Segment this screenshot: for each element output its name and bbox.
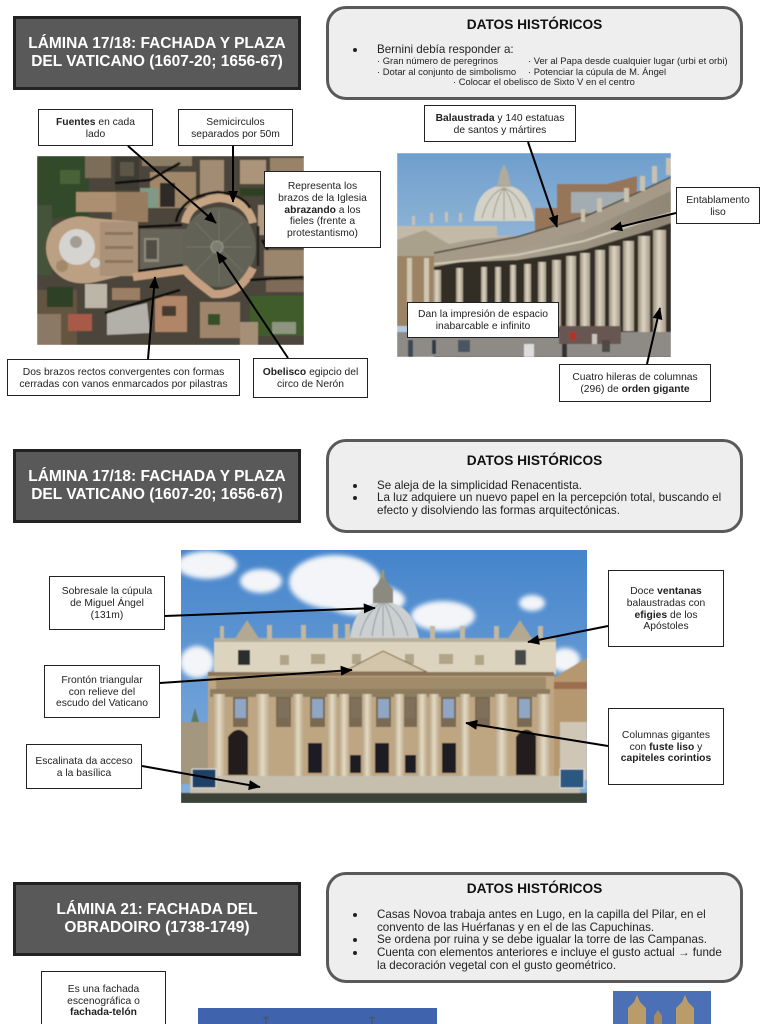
callout: hileras de columnas: (296) de orden gigante (580, 384, 690, 395)
bullet list: · Gran número de peregrinos (377, 55, 498, 66)
callout: semicirculos: Semicirculos (206, 117, 265, 128)
callout: cúpula: Sobresale la cúpula (62, 586, 152, 597)
bullet list: Se ordena por ruina y se debe igualar la torre de las Campanas. (377, 933, 707, 946)
callout: brazos rectos: cerradas con vanos enmarcados por pilastras (19, 378, 228, 390)
title: Lámina 17/18 first block: DEL VATICANO (1607-20; 1656-67) (31, 53, 283, 70)
callout: espacio infinito (407, 302, 559, 338)
bullet list: Se aleja de la simplicidad Renacentista. (377, 479, 582, 492)
panel: datos históricos 3 (326, 872, 743, 983)
title: Lámina 17/18 second block (13, 449, 301, 523)
callout: espacio infinito: Dan la impresión de espacio (418, 309, 548, 320)
title: Lámina 17/18 first block (13, 16, 301, 90)
arrow: ventanas (528, 626, 608, 642)
title: Lámina 17/18 second block: DEL VATICANO (1607-20; 1656-67) (31, 486, 283, 503)
callout: balaustrada (424, 105, 576, 142)
heading: DATOS HISTÓRICOS (467, 881, 602, 896)
callout: columnas gigantes: con fuste liso y (630, 742, 702, 753)
callout: cúpula: de Miguel Ángel (70, 598, 144, 609)
bullet list (353, 479, 721, 517)
bullet list (353, 43, 728, 87)
title: Lámina 21: OBRADOIRO (1738-1749) (64, 919, 250, 936)
callout: escalinata: Escalinata da acceso (35, 756, 133, 767)
arrow: frontón (160, 670, 352, 683)
callout: obelisco: Obelisco egipcio del (263, 367, 358, 378)
callout: brazos de la Iglesia (264, 171, 381, 248)
arrow: balaustrada (528, 142, 557, 227)
title: Lámina 17/18 second block: LÁMINA 17/18: FACHADA Y PLAZA (28, 468, 286, 485)
callout: fachada-telón: Es una fachada (68, 984, 139, 995)
callout: columnas gigantes: capiteles corintios (621, 753, 711, 764)
callout: balaustrada: de santos y mártires (454, 124, 546, 136)
bullet list: · Colocar el obelisco de Sixto V en el centro (453, 76, 635, 87)
image: Obradoiro towers (613, 991, 711, 1024)
bullet list: efecto y disolviendo las formas arquitectónicas. (377, 504, 620, 517)
bullet list: Casas Novoa trabaja antes en Lugo, en la capilla del Pilar, en el (377, 908, 706, 921)
arrow: brazos rectos (148, 277, 155, 359)
callout: frontón: Frontón triangular (61, 675, 143, 686)
image: colonnade photograph (397, 153, 671, 373)
title: Lámina 17/18 first block: LÁMINA 17/18: FACHADA Y PLAZA (28, 35, 286, 52)
callout: escalinata (26, 744, 142, 789)
bullet list: · Potenciar la cúpula de M. Ángel (528, 66, 666, 77)
title: Lámina 21: LÁMINA 21: FACHADA DEL (56, 901, 258, 918)
heading: DATOS HISTÓRICOS (467, 17, 602, 32)
callout: brazos de la Iglesia: Representa los (288, 181, 357, 192)
callout: semicirculos: separados por 50m (191, 128, 280, 140)
image: Obradoiro facade, wide crop (198, 1008, 437, 1024)
callout: frontón: escudo del Vaticano (56, 698, 148, 709)
arrow: obelisco (217, 252, 288, 358)
callout: escalinata: a la basílica (57, 768, 111, 778)
callout: cúpula (49, 576, 165, 630)
callout: ventanas: efigies de los (635, 610, 697, 620)
bullet list: Bernini debía responder a: (377, 43, 514, 56)
heading: DATOS HISTÓRICOS (467, 453, 602, 468)
callout: brazos de la Iglesia: protestantismo) (287, 228, 358, 239)
callout: hileras de columnas: Cuatro hileras de columnas (572, 372, 698, 383)
arrow: columnas (647, 308, 660, 364)
panel: datos históricos 2 (326, 439, 743, 533)
panel: datos históricos 1 (326, 6, 743, 100)
bullet list: · Ver al Papa desde cualquier lugar (urbi et orbi) (528, 55, 728, 66)
callout: fachada-telón: escenográfica o (67, 996, 140, 1007)
callout: frontón: con relieve del (69, 687, 135, 698)
image: St Peter's facade photograph (177, 550, 587, 803)
callout: brazos de la Iglesia: brazos de la Iglesia (278, 193, 367, 204)
callout: fachada-telón (41, 971, 166, 1024)
callout: brazos rectos: Dos brazos rectos convergentes con formas (23, 367, 224, 378)
callout: balaustrada: Balaustrada y 140 estatuas (436, 113, 564, 124)
bullet list: Cuenta con elementos anteriores e incluye el gusto actual → funde (377, 946, 722, 959)
callout: entablamento: liso (710, 206, 726, 218)
callout: obelisco: circo de Nerón (277, 379, 344, 390)
callout: entablamento (676, 187, 760, 224)
callout: ventanas: Doce ventanas (630, 586, 702, 597)
arrow: entablamento (611, 213, 676, 229)
bullet list: · Dotar al conjunto de simbolismo (377, 66, 516, 77)
callout: fuentes: lado (86, 128, 105, 140)
callout: brazos de la Iglesia: fieles (frente a (290, 216, 355, 227)
callout: hileras de columnas (559, 364, 711, 402)
arrow: cúpula (165, 608, 375, 616)
callout: ventanas: balaustradas con (627, 598, 705, 609)
callout: espacio infinito: inabarcable e infinito (436, 321, 530, 332)
callout: ventanas (608, 570, 724, 647)
callout: columnas gigantes: Columnas gigantes (622, 730, 710, 741)
callout: brazos rectos (7, 359, 240, 396)
arrow: escalinata (142, 766, 260, 787)
callout: entablamento: Entablamento (686, 195, 750, 206)
callout: semicirculos (178, 109, 293, 146)
title: Lámina 21 (13, 882, 301, 956)
callout: frontón (44, 665, 160, 718)
arrow: fuentes (128, 146, 216, 223)
images layer (37, 153, 711, 1024)
callout: ventanas: Apóstoles (643, 621, 689, 632)
callout: obelisco (253, 358, 368, 398)
callout: fachada-telón: fachada-telón (70, 1007, 137, 1018)
bullet list: la decoración vegetal con el gusto geométrico. (377, 959, 616, 972)
arrow: semicirculos (232, 146, 234, 202)
bullet list: La luz adquiere un nuevo papel en la percepción total, buscando el (377, 491, 721, 504)
callout: brazos de la Iglesia: abrazando a los (284, 205, 361, 216)
image: aerial view of St Peter's square (37, 156, 304, 345)
bullet list: convento de las Huérfanas y en el de las Capuchinas. (377, 921, 654, 934)
callout: cúpula: (131m) (91, 610, 123, 621)
bullet list (353, 908, 722, 972)
arrow: columnas gigantes (466, 723, 608, 746)
callout: fuentes (38, 109, 153, 146)
callout: fuentes: Fuentes en cada (56, 117, 135, 128)
callout: columnas gigantes (608, 708, 724, 785)
